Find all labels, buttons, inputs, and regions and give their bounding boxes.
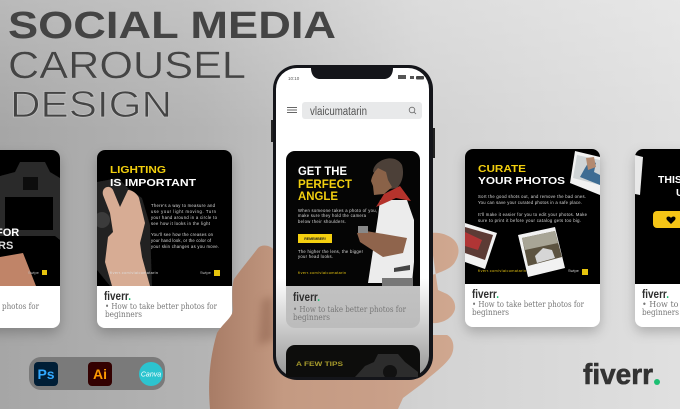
panel: next card	[286, 345, 420, 377]
polaroid top right	[570, 151, 600, 195]
polaroid center	[518, 227, 565, 277]
panel: right partial card: fiverr.	[642, 289, 669, 301]
heading: ANGLE	[298, 191, 338, 203]
search bar	[302, 102, 422, 119]
title: CAROUSEL	[8, 45, 246, 87]
panel: featured card	[286, 151, 420, 328]
title: SOCIAL MEDIA	[8, 5, 336, 47]
heading	[478, 163, 565, 187]
fiverr brand logo: fiverr	[583, 359, 653, 391]
panel: lighting card: fiverr.com/vlaicumatarin	[110, 271, 158, 275]
panel: curate card: fiverr.com/vlaicumatarin	[478, 269, 526, 273]
fiverr logo: fiverr.	[472, 289, 499, 301]
body text: There's a way to measure and	[151, 203, 216, 208]
body text: below their shoulders.	[298, 219, 346, 224]
body text: see how it looks in the light	[151, 221, 211, 226]
body text	[478, 194, 588, 223]
status bar	[288, 75, 424, 81]
search bar: vlaicumatarin	[310, 106, 367, 118]
panel: featured card: The higher the lens, the bigger	[298, 249, 364, 254]
body text: make sure they hold the camera	[298, 213, 367, 218]
caption: • How to take better photos for	[105, 302, 217, 311]
panel: left partial card: Swipe	[28, 270, 40, 275]
body text: You can save your curated photos in a safe place.	[478, 200, 582, 205]
panel: lighting card	[94, 150, 232, 328]
heading: YOUR PHOTOS	[478, 175, 565, 187]
body text: sure to print it before your catalog gets too big.	[478, 218, 581, 223]
caption	[293, 305, 406, 322]
body text: your hand look, or the color of	[151, 238, 212, 243]
remember button: REMEMBER!	[304, 237, 326, 241]
heading	[110, 164, 197, 189]
body text: When someone takes a photo of you,	[298, 208, 377, 213]
body text	[298, 208, 377, 224]
caption	[472, 300, 584, 317]
caption: beginners	[472, 308, 509, 317]
icon: photoshop: Ps	[37, 366, 55, 382]
tool icons	[29, 357, 165, 390]
caption: beginners	[105, 310, 142, 319]
body text: You'll see how the creases on	[151, 232, 214, 237]
panel: left partial card	[0, 150, 60, 328]
title	[8, 5, 336, 125]
status bar: 10:10	[288, 76, 300, 81]
body text: Sort the good shots out, and remove the bad ones.	[478, 194, 586, 199]
caption	[105, 302, 217, 319]
panel: right partial card	[635, 149, 680, 327]
heading	[298, 166, 352, 203]
polaroid left	[465, 223, 497, 269]
body text: use your light moving. Turn	[151, 209, 217, 214]
notch	[311, 68, 393, 79]
icon: illustrator: Ai	[93, 366, 107, 382]
icon: canva: Canva	[141, 372, 161, 378]
hand holding camera	[94, 178, 152, 286]
panel: next card: A FEW TIPS	[296, 361, 344, 368]
heading: CURATE	[478, 163, 526, 175]
remember button	[298, 234, 332, 243]
camera photo	[0, 162, 60, 286]
fiverr logo: fiverr.	[104, 291, 131, 303]
thumb crease shading	[258, 296, 274, 345]
body text	[151, 203, 219, 249]
panel: curate card: Swipe	[568, 268, 580, 273]
caption: • How to take better photos for	[472, 300, 584, 309]
title: DESIGN	[10, 84, 172, 125]
heading: LIGHTING	[110, 164, 166, 176]
panel: left partial card: photos for	[2, 302, 39, 311]
panel: featured card: your head looks.	[298, 254, 333, 259]
man portrait	[357, 158, 414, 286]
heading: IS IMPORTANT	[110, 177, 197, 189]
body text: your skin changes as you move.	[151, 244, 219, 249]
body text: It'll make it easier for you to edit your photos. Make	[478, 212, 588, 217]
phone	[271, 65, 435, 395]
panel: curate card	[465, 149, 600, 327]
caption: • How to take better photos for	[293, 305, 406, 314]
body text: your hand around in a circle to	[151, 215, 218, 220]
caption: beginners	[293, 313, 330, 322]
hand	[209, 200, 459, 409]
panel: featured card: fiverr.com/vlaicumatarin	[298, 271, 346, 275]
heading: GET THE	[298, 166, 347, 178]
fiverr logo: fiverr.	[293, 292, 320, 304]
screen	[276, 68, 429, 377]
heading: PERFECT	[298, 179, 352, 191]
menu icon	[287, 108, 297, 112]
panel: lighting card: Swipe	[200, 270, 212, 275]
